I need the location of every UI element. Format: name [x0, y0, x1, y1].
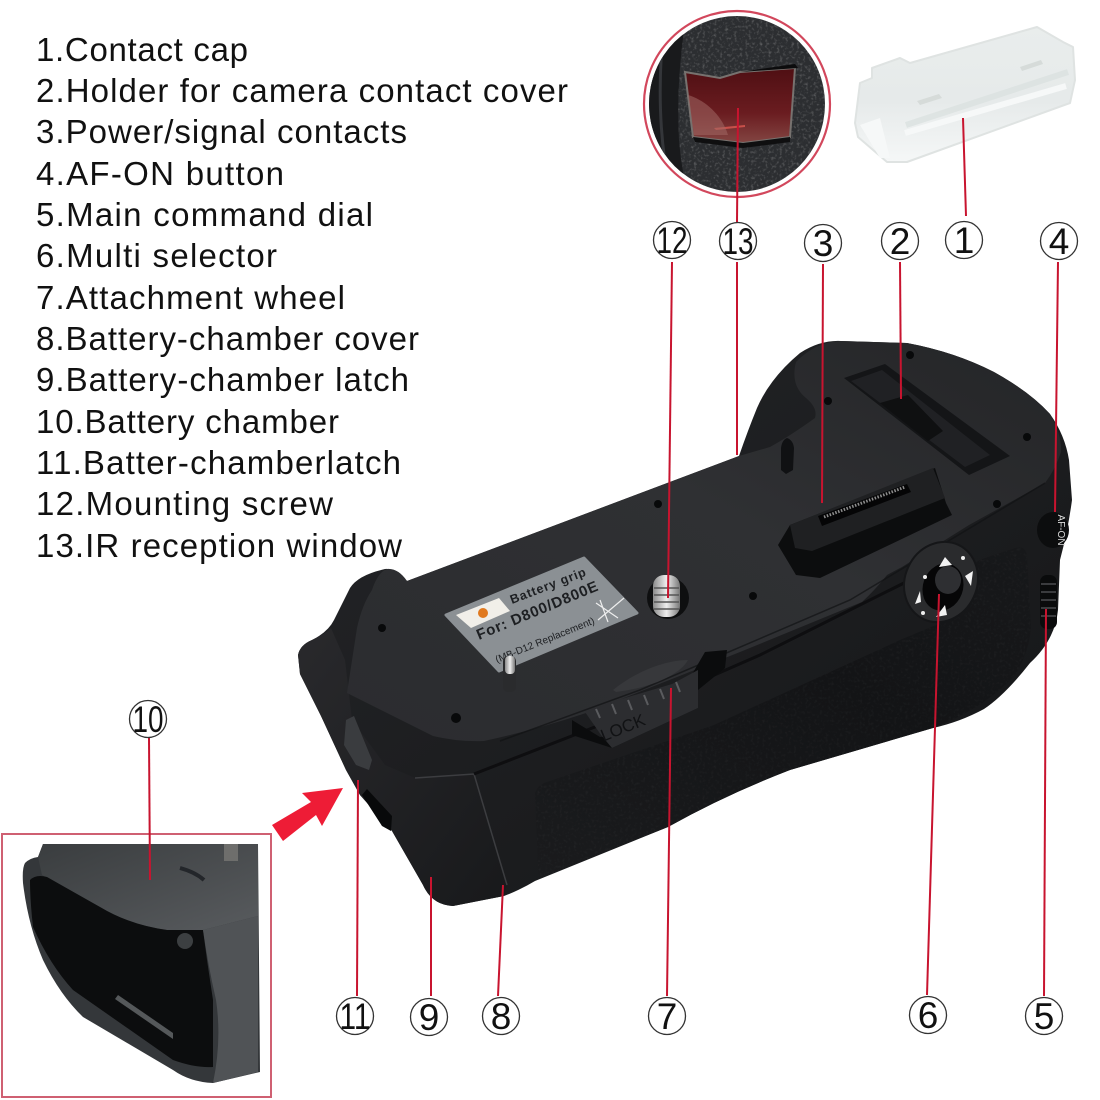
callout numbers: 1: [954, 220, 974, 261]
callout numbers: 8: [491, 996, 511, 1037]
parts list: 4.AF-ON button: [36, 155, 284, 192]
parts list: 10.Battery chamber: [36, 403, 339, 440]
callout numbers: 5: [1034, 996, 1054, 1037]
callout numbers: 9: [419, 997, 439, 1038]
callout numbers: 11: [340, 996, 370, 1037]
product label: [446, 558, 637, 671]
screw holes: [378, 351, 1031, 723]
alignment pin: [781, 438, 794, 474]
contact cap: [855, 27, 1075, 162]
top plate: [347, 341, 1061, 741]
attachment wheel: LOCK: [598, 710, 649, 745]
battery-chamber latch: [344, 716, 392, 831]
AF-ON button: AF-ON: [1055, 514, 1066, 546]
product label: (MB-D12 Replacement): [494, 616, 596, 666]
inset: IR reception window close-up: [644, 10, 830, 202]
parts list: 8.Battery-chamber cover: [36, 320, 419, 357]
red arrow: [272, 788, 343, 841]
main command dial: [1040, 575, 1057, 629]
callout numbers: 4: [1049, 221, 1069, 262]
leader lines: [149, 108, 1058, 996]
battery cover seam: [415, 774, 507, 885]
chamber photo: [23, 844, 260, 1083]
main silhouette: [298, 341, 1072, 906]
callout numbers: 7: [657, 996, 677, 1037]
inset frame: battery chamber: [2, 834, 271, 1097]
AF-ON button: [1037, 512, 1069, 548]
contact-cover holder tab: [880, 395, 943, 441]
locating pin: [503, 656, 516, 692]
callout numbers: 6: [918, 995, 938, 1036]
parts list: 7.Attachment wheel: [36, 279, 345, 316]
parts list: 12.Mounting screw: [36, 485, 333, 522]
callout numbers: 13: [722, 221, 754, 262]
contact connector: [778, 468, 952, 578]
contact-holder recess: [844, 364, 1010, 475]
parts list: 6.Multi selector: [36, 237, 277, 274]
callout numbers: [130, 220, 1078, 1038]
parts list: 9.Battery-chamber latch: [36, 361, 409, 398]
product label: Battery grip: [508, 565, 588, 607]
textured grip panel: [535, 547, 1031, 876]
attachment wheel: [572, 650, 727, 748]
callout numbers: 12: [656, 220, 688, 261]
parts list: 2.Holder for camera contact cover: [36, 72, 568, 109]
parts list: 13.IR reception window: [36, 527, 402, 564]
parts list: 11.Batter-chamberlatch: [36, 444, 401, 481]
end cap shade: [298, 628, 507, 906]
mounting screw: [647, 575, 689, 619]
parts list: [36, 31, 568, 564]
callout numbers: 2: [890, 221, 910, 262]
product label: For: D800/D800E: [474, 578, 601, 644]
parts list: 5.Main command dial: [36, 196, 373, 233]
multi selector: [891, 530, 991, 634]
battery grip body: [298, 341, 1072, 906]
callout numbers: 3: [813, 223, 833, 264]
callout numbers: 10: [132, 699, 164, 740]
parts list: 3.Power/signal contacts: [36, 113, 407, 150]
parts list: 1.Contact cap: [36, 31, 248, 68]
